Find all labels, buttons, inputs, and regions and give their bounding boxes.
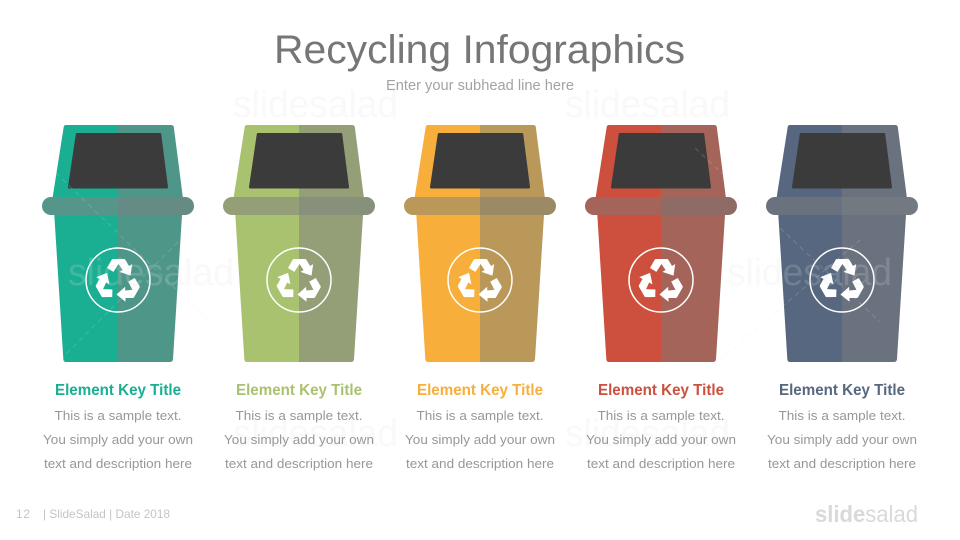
text block: navy [767,382,917,471]
text block: green: Element Key Title [236,382,362,399]
text block: red: text and description here [587,456,735,471]
icon: recycling symbol [86,248,150,312]
text block: navy: This is a sample text. [778,408,906,423]
bin: teal [42,125,194,362]
bin: red [585,125,737,362]
text block: teal [43,382,193,471]
text block: green: This is a sample text. [236,408,362,423]
text block: orange: text and description here [406,456,554,471]
text block: orange: This is a sample text. [416,408,544,423]
text block: teal: This is a sample text. [54,408,182,423]
bin: navy [766,125,918,362]
footer logo: slidesalad [815,501,918,527]
watermark: slidesalad [233,413,398,455]
icon: recycling symbol [448,248,512,312]
text block: green [224,382,374,471]
watermark: slidesalad [565,413,730,455]
text block: navy: text and description here [768,456,916,471]
text block: orange [405,382,555,471]
footer: page number and date: 12 [16,507,30,521]
icon: recycling symbol [629,248,693,312]
bin: green [223,125,375,362]
watermark [68,84,892,455]
text block: red: Element Key Title [598,382,724,399]
watermark: slidesalad [68,252,234,294]
bin: orange [404,125,556,362]
text block: green: You simply add your own [224,432,374,447]
text block: red [586,382,736,471]
text block: red: This is a sample text. [598,408,724,423]
watermark: slidesalad [727,252,892,294]
watermark: slidesalad [233,84,398,126]
text block: green: text and description here [225,456,373,471]
text block: orange: Element Key Title [417,382,543,399]
footer: page number and date: | SlideSalad | Date 2018 [43,507,170,521]
text block: teal: text and description here [44,456,192,471]
text block: navy: Element Key Title [779,382,905,399]
title: Recycling Infographics [274,28,685,72]
icon: recycling symbol [267,248,331,312]
text block: navy: You simply add your own [767,432,917,447]
text block: red: You simply add your own [586,432,736,447]
text block: orange: You simply add your own [405,432,555,447]
watermark: slidesalad [565,84,730,126]
icon: recycling symbol [810,248,874,312]
subtitle: Enter your subhead line here [386,78,574,94]
text block: teal: You simply add your own [43,432,193,447]
text block: teal: Element Key Title [55,382,181,399]
